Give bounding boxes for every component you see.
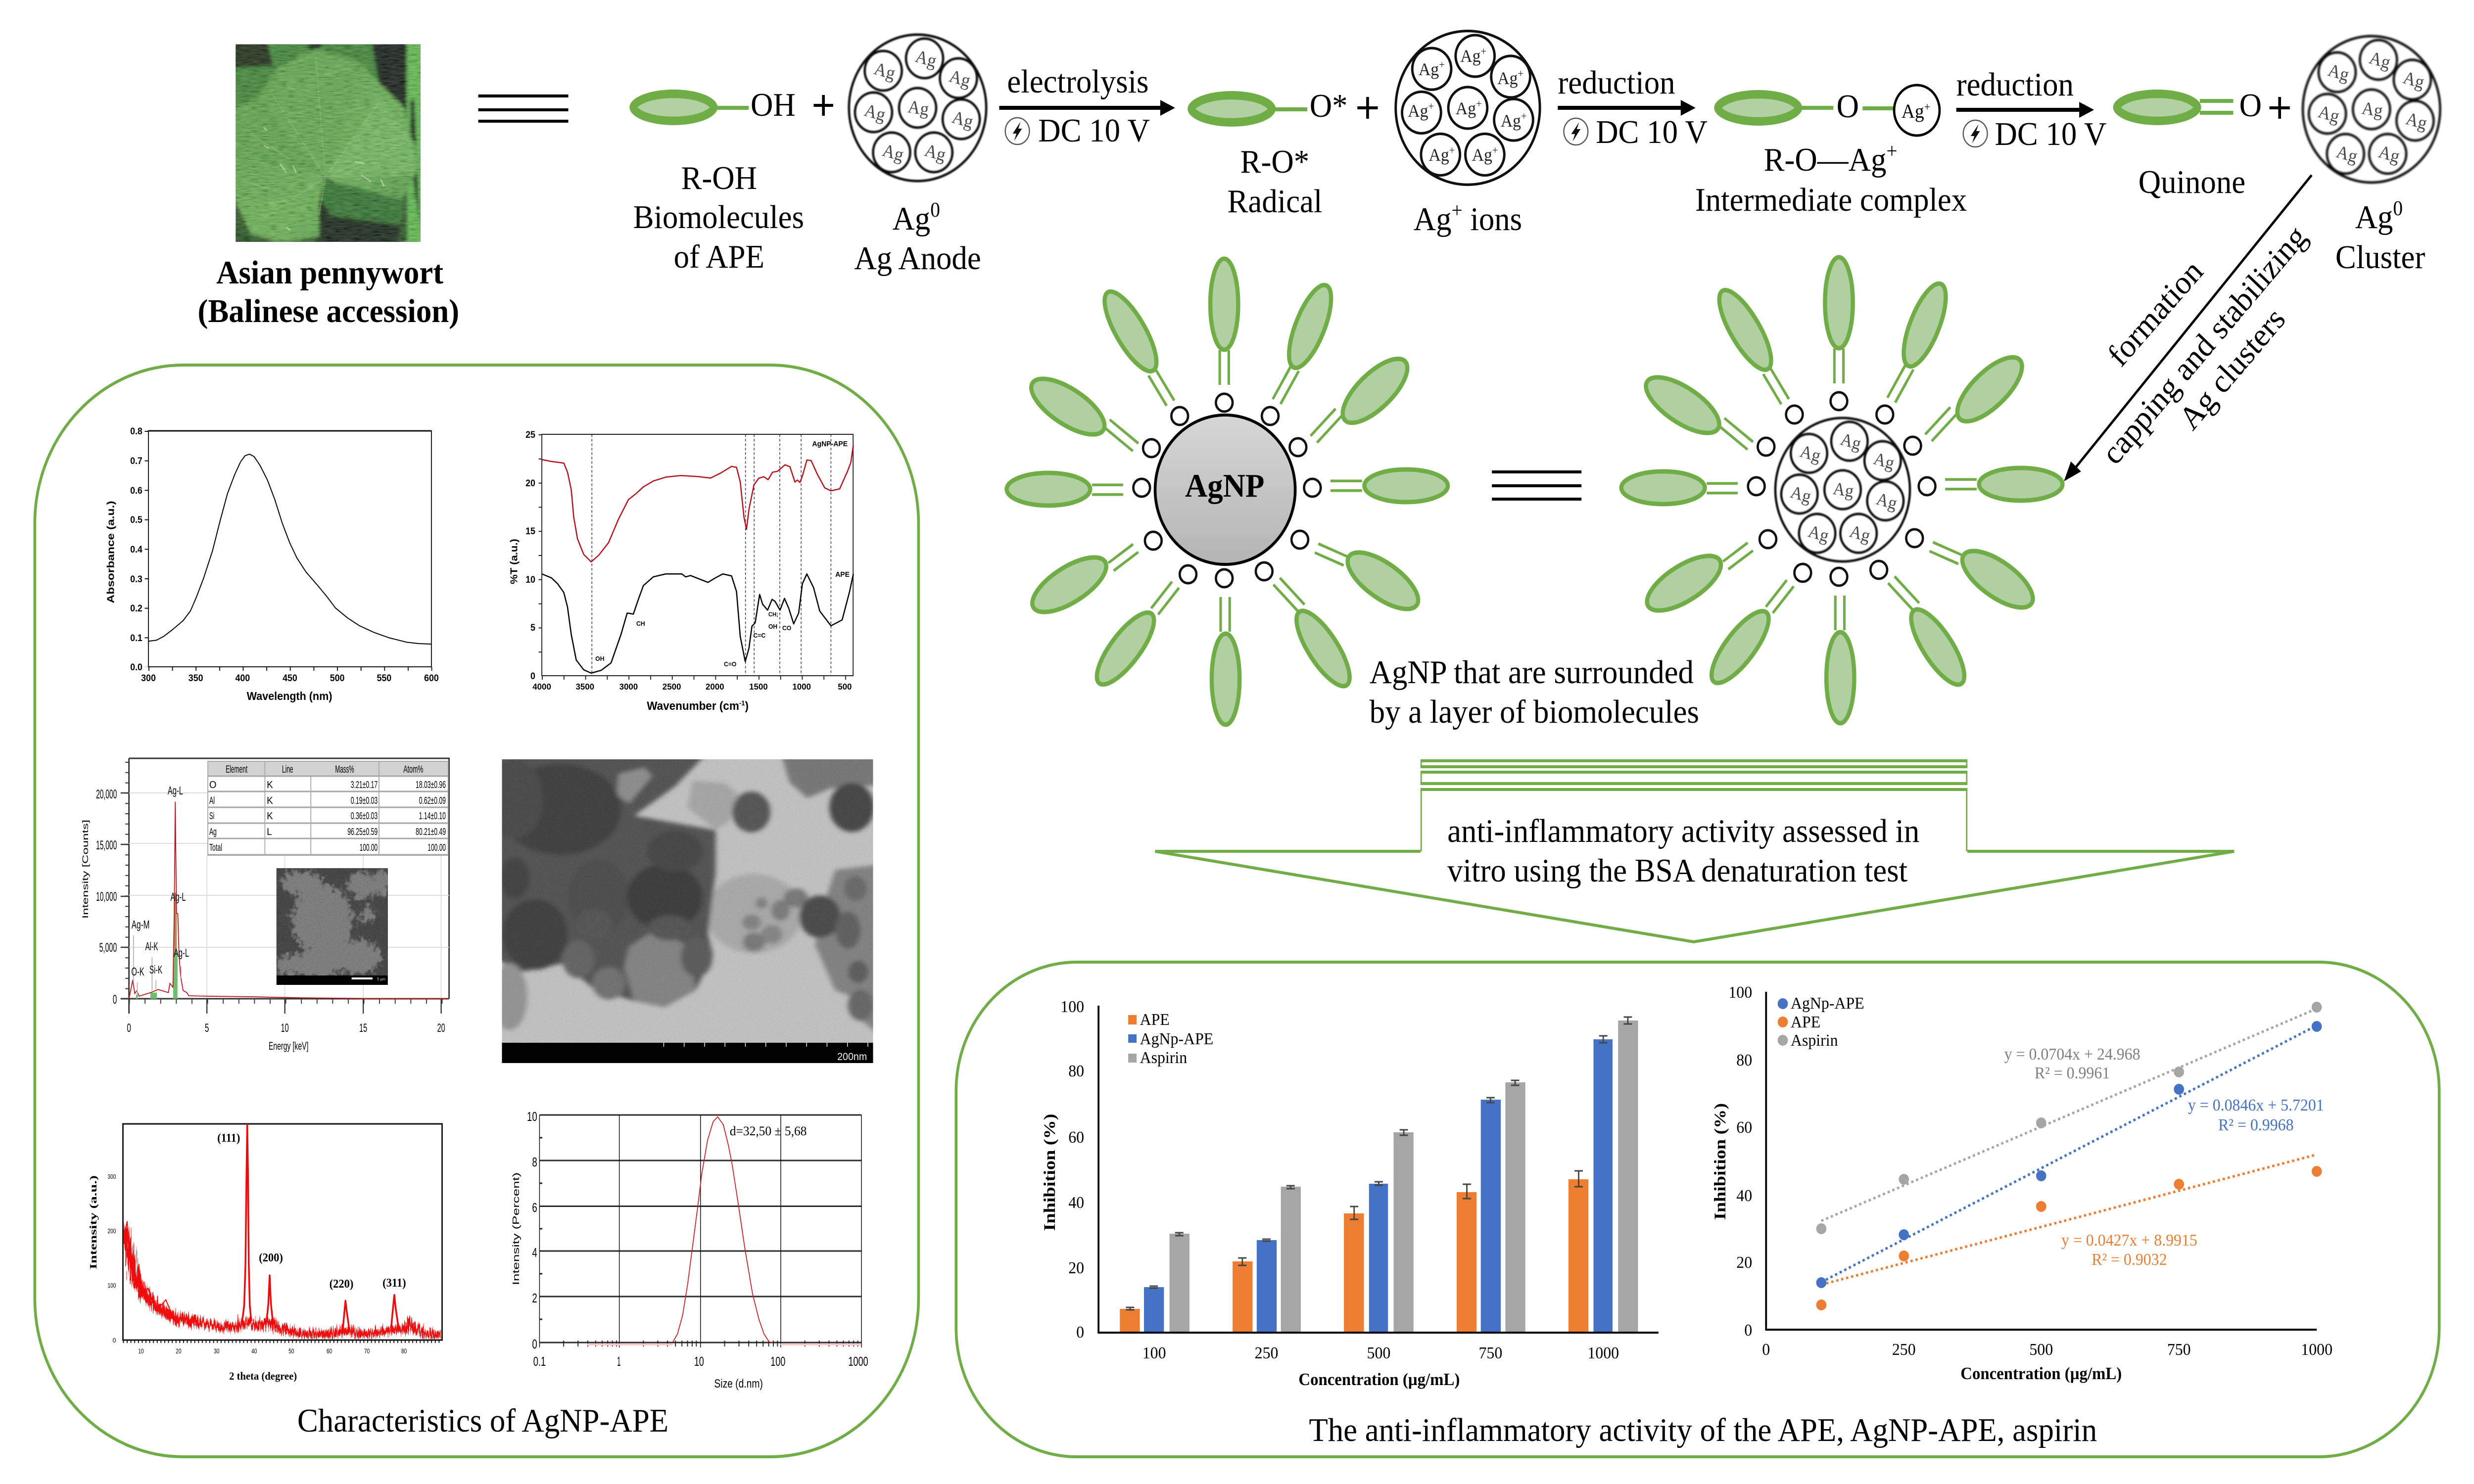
chart: FTIR spectra of AgNP-APE and APE: 3500 [575,681,594,692]
chart: UV-Vis absorbance spectrum: 0.0 [130,661,143,672]
label: AgNP surrounded by biomolecules [1370,654,1699,730]
cluster: Ag0 cluster: Ag [2361,97,2384,121]
cluster: Ag0 cluster [2303,36,2440,183]
diagram: Ag cluster surrounded by biomolecules: Ag [1874,489,1899,513]
chart: XRD pattern: (311) [382,1276,406,1290]
cluster: Ag anode: Ag [948,65,973,91]
image: SEM micrograph inset [276,868,390,985]
regression label: aspirin [2004,1045,2141,1082]
label: Ag+ ions: ions [1463,201,1522,237]
plus sign [2270,97,2290,119]
chart: XRD pattern: 80 [401,1347,407,1355]
chart: EDS spectrum with element table and SEM inset: Total [209,842,222,853]
diagram: AgNP surrounded by biomolecules: AgNP [1185,467,1264,504]
chart: DLS size distribution: Size (d.nm) [714,1377,763,1390]
diagram: Ag cluster surrounded by biomolecules: Ag [1872,448,1897,473]
chart: EDS spectrum with element table and SEM inset: 15,000 [96,838,117,852]
chart: FTIR spectra of AgNP-APE and APE: 2500 [663,681,681,692]
chart: UV-Vis absorbance spectrum: 0.2 [130,603,143,613]
scatter chart: inhibition linear regression: 40 [1736,1187,1752,1205]
scatter chart: inhibition linear regression: 0 [1744,1321,1752,1340]
legend: bar chart: AgNp-APE [1140,1030,1213,1048]
cluster: Ag+ ions: + [1449,144,1455,156]
diagram: Ag cluster surrounded by biomolecules: Ag [1839,429,1863,454]
legend: bar chart: APE [1140,1011,1170,1029]
scatter chart: inhibition linear regression: 750 [2167,1341,2191,1359]
legend: scatter chart [1778,994,1864,1050]
chart: EDS spectrum with element table and SEM inset: Al [209,795,215,806]
caption: anti-inflammatory activity comparison: The anti-inflammatory activity of the APE, AgNP-APE, aspirin [1309,1412,2097,1448]
chart: FTIR spectra of AgNP-APE and APE: CH [636,620,645,627]
chart: EDS spectrum with element table and SEM inset: Ag-L [168,784,183,797]
chart: EDS spectrum with element table and SEM inset: 0.19±0.03 [351,795,378,806]
cluster: Ag+ ions: Ag [1428,145,1449,165]
molecule: R-OH biomolecule: OH [751,87,796,123]
label: R-O-Ag+ intermediate complex [1695,139,1967,218]
cluster: Ag+ ions: + [1521,110,1527,122]
label: R-O* radical: R-O* [1240,143,1309,180]
chart: FTIR spectra of AgNP-APE and APE: C=C [753,632,765,639]
chart: FTIR spectra of AgNP-APE and APE: 1000 [792,681,811,692]
bar chart: inhibition by concentration: 100 [1060,998,1084,1016]
chart: FTIR spectra of AgNP-APE and APE: AgNP-APE [812,440,848,448]
chart: EDS spectrum with element table and SEM inset: Al-K [145,940,158,953]
chart: EDS spectrum with element table and SEM inset: 10 [281,1021,289,1034]
bar chart: inhibition by concentration: 0 [1076,1323,1084,1342]
scatter chart: inhibition linear regression [1712,983,2332,1383]
regression label: AgNp-APE [2188,1096,2324,1134]
chart: EDS spectrum with element table and SEM inset: Energy [keV] [269,1040,308,1052]
arrow: second reduction step: reduction [1956,66,2074,103]
cluster: Ag0 cluster: Ag [2316,101,2341,127]
chart: FTIR spectra of AgNP-APE and APE: 500 [838,681,852,692]
label: Ag0 Ag anode [854,198,981,277]
bar chart: inhibition by concentration: 40 [1068,1194,1084,1212]
chart: FTIR spectra of AgNP-APE and APE: CO [782,625,791,632]
molecule: quinone [2113,87,2262,125]
chart: XRD pattern [89,1124,442,1382]
chart: FTIR spectra of AgNP-APE and APE: ) [745,699,749,712]
bar chart: inhibition by concentration: 500 [1367,1344,1390,1362]
chart: UV-Vis absorbance spectrum: 0.4 [130,544,143,555]
molecule: R-O* radical [1188,88,1348,127]
diagram: Ag cluster surrounded by biomolecules [1621,257,2062,723]
molecule: R-O-Ag+ intermediate complex: + [1924,100,1930,114]
chart: EDS spectrum with element table and SEM inset: 15 [359,1021,367,1034]
striped down arrow: anti-inflammatory activity: vitro using the BSA denaturation test [1447,852,1907,889]
heading: Asian pennywort label: (Balinese accession) [197,293,459,329]
label: Ag+ ions: + [1452,199,1463,222]
molecule: quinone: O [2239,87,2262,124]
bar chart: inhibition by concentration: 100 [1142,1344,1166,1362]
chart: XRD pattern: (111) [217,1131,240,1145]
chart: XRD pattern: 200 [108,1228,116,1235]
image: TEM micrograph: 200nm [837,1051,867,1063]
diagram: AgNP surrounded by biomolecules [1007,259,1448,725]
plus sign [1357,97,1378,119]
chart: XRD pattern: 60 [327,1347,332,1355]
chart: UV-Vis absorbance spectrum: 0.3 [130,573,143,584]
regression label: APE: y = 0.0427x + 8.9915 [2061,1231,2197,1250]
cluster: Ag+ ions: + [1480,45,1486,57]
cluster: Ag+ ions: Ag [1408,101,1428,121]
chart: UV-Vis absorbance spectrum: 500 [330,672,344,683]
arrow: second reduction step [1956,66,2106,152]
chart: XRD pattern: 300 [108,1173,116,1180]
regression label: aspirin: R² = 0.9961 [2035,1064,2110,1082]
scatter chart: inhibition linear regression: 500 [2029,1341,2053,1359]
chart: FTIR spectra of AgNP-APE and APE: 25 [525,429,535,440]
chart: XRD pattern: 40 [251,1347,257,1355]
chart: FTIR spectra of AgNP-APE and APE: %T (a.u.) [508,539,520,584]
arrow: electrolysis step: DC 10 V [1038,112,1150,149]
scatter chart: inhibition linear regression: 1000 [2301,1341,2332,1359]
chart: EDS spectrum with element table and SEM inset: Ag [209,826,217,837]
chart: DLS size distribution: d=32,50 ± 5,68 [730,1124,807,1138]
chart: DLS size distribution: 0 [532,1337,537,1351]
label: R-O-Ag+ intermediate complex: Intermediate complex [1695,182,1967,218]
cluster: Ag anode: Ag [872,58,898,84]
chart: DLS size distribution: 4 [532,1246,537,1260]
chart: XRD pattern: (200) [259,1251,283,1264]
chart: UV-Vis absorbance spectrum: 400 [235,672,250,683]
chart: EDS spectrum with element table and SEM inset: 20 [437,1021,445,1034]
chart: FTIR spectra of AgNP-APE and APE: 0 [530,670,535,681]
arrow: first reduction step [1558,64,1708,150]
molecule: R-O-Ag+ intermediate complex: O [1837,88,1859,125]
chart: EDS spectrum with element table and SEM inset: 10,000 [96,890,117,904]
chart: XRD pattern: (220) [330,1277,353,1291]
panel: anti-inflammatory activity [956,962,2439,1457]
chart: UV-Vis absorbance spectrum: 0.8 [130,425,143,436]
chart: UV-Vis absorbance spectrum: 0.1 [130,632,143,643]
chart: DLS size distribution: 10 [527,1110,537,1124]
label: Ag0 Ag anode: 0 [930,198,940,221]
chart: DLS size distribution: 1000 [848,1354,868,1369]
molecule: R-O-Ag+ intermediate complex: Ag [1902,100,1924,122]
chart: EDS spectrum with element table and SEM inset: 0.62±0.09 [419,795,446,806]
chart: EDS spectrum with element table and SEM inset: 5 [205,1021,209,1034]
molecule: R-OH biomolecule [629,87,796,125]
chart: UV-Vis absorbance spectrum: Wavelength (nm) [247,690,332,702]
chart: EDS spectrum with element table and SEM inset: L [267,826,272,837]
legend: bar chart [1128,1011,1213,1067]
cluster: Ag+ ions: Ag [1456,98,1476,118]
chart: EDS spectrum with element table and SEM inset: Mass% [335,764,354,775]
label: R-O-Ag+ intermediate complex: + [1886,139,1898,162]
chart: XRD pattern: 30 [214,1347,219,1355]
regression label: AgNp-APE: R² = 0.9968 [2218,1116,2294,1134]
cluster: Ag0 cluster: Ag [2404,108,2429,134]
striped down arrow: anti-inflammatory activity: anti-inflammatory activity assessed in [1447,813,1919,849]
chart: UV-Vis absorbance spectrum: 0.7 [130,455,143,466]
scatter chart: inhibition linear regression: 250 [1892,1341,1916,1359]
chart: DLS size distribution: 100 [770,1354,785,1369]
chart: EDS spectrum with element table and SEM inset: Atom% [403,764,424,775]
cluster: Ag anode: Ag [862,99,888,125]
chart: EDS spectrum with element table and SEM inset: Ag-L [174,946,189,959]
chart: EDS spectrum with element table and SEM inset: O [209,779,216,790]
label: AgNP surrounded by biomolecules: by a layer of biomolecules [1370,694,1699,730]
scatter chart: inhibition linear regression: 100 [1728,983,1752,1002]
scatter chart: inhibition linear regression: Concentration (µg/mL) [1960,1364,2122,1383]
cluster: Ag+ ions: + [1518,67,1523,80]
bar chart: inhibition by concentration: 80 [1068,1062,1084,1080]
chart: FTIR spectra of AgNP-APE and APE: 3000 [619,681,638,692]
legend: scatter chart: AgNp-APE [1791,994,1864,1013]
chart: FTIR spectra of AgNP-APE and APE: CH; [768,611,778,618]
chart: UV-Vis absorbance spectrum: 600 [424,672,439,683]
cluster: Ag0 cluster: Ag [2377,141,2402,167]
label: Ag0 cluster: Cluster [2335,239,2426,276]
chart: EDS spectrum with element table and SEM inset: K [267,779,273,790]
label: R-O-Ag+ intermediate complex: R-O—Ag [1764,141,1886,178]
image: TEM micrograph [487,747,889,1063]
legend: bar chart: Aspirin [1140,1049,1187,1067]
label: AgNP surrounded by biomolecules: AgNP that are surrounded [1370,654,1694,691]
chart: UV-Vis absorbance spectrum: 550 [377,672,391,683]
chart: EDS spectrum with element table and SEM inset: O-K [131,965,144,978]
label: R-OH biomolecules of APE: R-OH [681,160,757,196]
chart: EDS spectrum with element table and SEM inset: 20,000 [96,788,117,801]
chart: EDS spectrum with element table and SEM inset: 0 [127,1021,131,1034]
chart: EDS spectrum with element table and SEM inset: 1.14±0.10 [419,810,446,822]
cluster: Ag anode: Ag [881,139,906,165]
diagram: Ag cluster surrounded by biomolecules: Ag [1832,478,1855,501]
rotated label: formation, capping and stabilizing Ag clusters: formation [2101,253,2210,373]
bar chart: inhibition by concentration [1041,998,1659,1389]
chart: FTIR spectra of AgNP-APE and APE: 4000 [532,681,551,692]
chart: FTIR spectra of AgNP-APE and APE: C=O [724,661,737,668]
equivalence sign: AgNP to Ag cluster core [1492,472,1581,499]
label: Ag+ ions: Ag [1414,201,1452,237]
diagram: Ag cluster surrounded by biomolecules: Ag [1798,441,1823,466]
plus sign [813,95,833,116]
scatter chart: inhibition linear regression: 0 [1762,1341,1770,1359]
arrow: electrolysis step [999,63,1175,149]
chart: EDS spectrum with element table and SEM inset: 18.03±0.96 [416,779,446,790]
chart: EDS spectrum with element table and SEM inset: 0.36±0.03 [351,810,378,822]
chart: FTIR spectra of AgNP-APE and APE: APE [835,571,850,579]
chart: FTIR spectra of AgNP-APE and APE: 2000 [706,681,724,692]
chart: XRD pattern: 10 [138,1347,144,1355]
label: R-OH biomolecules of APE: of APE [674,238,764,275]
chart: EDS spectrum with element table and SEM inset: Si-K [149,963,162,976]
chart: UV-Vis absorbance spectrum: 0.5 [130,514,143,525]
chart: UV-Vis absorbance spectrum: 350 [189,672,203,683]
label: Ag0 Ag anode: Ag Anode [854,240,981,277]
chart: DLS size distribution: 1 [617,1354,620,1369]
chart: UV-Vis absorbance spectrum: 0.6 [130,485,143,496]
regression label: AgNp-APE: y = 0.0846x + 5.7201 [2188,1096,2324,1114]
chart: XRD pattern: Intensity (a.u.) [89,1175,99,1269]
label: R-OH biomolecules of APE [633,160,804,275]
chart: FTIR spectra of AgNP-APE and APE: 5 [530,622,535,633]
chart: DLS size distribution: Intensity (Percent) [511,1172,522,1285]
chart: UV-Vis absorbance spectrum: 450 [283,672,297,683]
chart: EDS spectrum with element table and SEM inset: 0 [113,993,117,1007]
chart: DLS size distribution: 6 [532,1201,537,1215]
molecule: R-O-Ag+ intermediate complex [1714,85,1940,136]
label: Ag0 cluster: Ag [2355,199,2393,235]
chart: XRD pattern: 0 [113,1337,116,1344]
cluster: Ag+ ions: + [1428,100,1434,112]
chart: EDS spectrum with element table and SEM inset: Element [226,764,247,775]
label: Ag0 Ag anode: Ag [892,200,930,237]
chart: FTIR spectra of AgNP-APE and APE: 20 [525,477,535,488]
molecule: R-O* radical: O* [1310,88,1348,124]
bar chart: inhibition by concentration: Inhibition (%) [1041,1114,1059,1231]
chart: EDS spectrum with element table and SEM inset: Si [209,810,214,822]
chart: UV-Vis absorbance spectrum: 300 [141,672,156,683]
regression label: aspirin: y = 0.0704x + 24.968 [2004,1045,2141,1064]
arrow: first reduction step: reduction [1558,64,1675,101]
chart: UV-Vis absorbance spectrum [105,425,439,702]
chart: EDS spectrum with element table and SEM inset: K [267,810,273,822]
chart: FTIR spectra of AgNP-APE and APE: 15 [525,525,535,536]
cluster: Ag+ ions: + [1476,97,1482,110]
chart: EDS spectrum with element table and SEM inset: 80.21±0.49 [416,826,446,837]
label: R-O* radical [1227,143,1322,220]
cluster: Ag+ ions: + [1439,58,1445,71]
diagram: Ag cluster surrounded by biomolecules: Ag [1848,521,1872,546]
bar chart: inhibition by concentration: 750 [1478,1344,1502,1362]
label: quinone: Quinone [2139,164,2245,200]
cluster: Ag anode: Ag [950,106,975,132]
label: Ag0 cluster: 0 [2393,197,2403,220]
scatter chart: inhibition linear regression: 60 [1736,1118,1752,1137]
cluster: Ag anode: Ag [923,139,948,165]
striped down arrow: anti-inflammatory activity [1155,759,2234,942]
arrow: first reduction step: DC 10 V [1596,114,1708,150]
chart: XRD pattern: 50 [288,1347,294,1355]
label: Ag0 cluster [2335,197,2426,276]
label: R-OH biomolecules of APE: Biomolecules [633,199,804,235]
label: R-O* radical: Radical [1227,183,1322,220]
cluster: Ag+ ions: Ag [1501,111,1521,131]
bar chart: inhibition by concentration: 60 [1068,1128,1084,1147]
rotated label: formation, capping and stabilizing Ag clusters: capping and stabilizing [2095,219,2314,471]
chart: EDS spectrum with element table and SEM inset: 96.25±0.59 [347,826,378,837]
image: SEM micrograph inset: 5 µm [377,977,385,981]
legend: scatter chart: Aspirin [1791,1031,1838,1050]
caption: characteristics of AgNP-APE: Characteristics of AgNP-APE [297,1402,668,1439]
scatter chart: inhibition linear regression: Inhibition (%) [1712,1103,1729,1220]
chart: EDS spectrum with element table and SEM inset: Ag-M [132,918,149,931]
cluster: Ag+ ions: Ag [1497,68,1518,88]
arrow: formation, capping and stabilizing [2064,175,2312,481]
scatter chart: inhibition linear regression: 20 [1736,1253,1752,1272]
chart: FTIR spectra of AgNP-APE and APE: Wavenumber (cm [647,699,739,712]
chart: EDS spectrum with element table and SEM inset: Ag-L [171,890,186,903]
chart: UV-Vis absorbance spectrum: Absorbance (a.u.) [105,501,116,603]
bar chart: inhibition by concentration: 250 [1255,1344,1278,1362]
chart: EDS spectrum with element table and SEM inset: 100.00 [360,842,378,853]
cluster: Ag+ ions: + [1492,144,1498,156]
cluster: Ag0 cluster: Ag [2326,59,2351,85]
chart: DLS size distribution: 8 [532,1155,537,1169]
cluster: Ag0 cluster: Ag [2401,67,2426,93]
chart: XRD pattern: 2 theta (degree) [229,1370,297,1382]
cluster: Ag0 cluster: Ag [2367,47,2392,73]
panel: characteristics of AgNP-APE [35,365,918,1457]
equivalence sign: leaf to biomolecule [478,96,569,121]
arrow: electrolysis step: electrolysis [1007,63,1149,100]
legend: scatter chart: APE [1791,1013,1820,1031]
bar chart: inhibition by concentration: 20 [1068,1259,1084,1277]
chart: EDS spectrum with element table and SEM inset: K [267,795,273,806]
chart: EDS spectrum with element table and SEM inset [81,758,449,1052]
chart: FTIR spectra of AgNP-APE and APE [508,429,854,712]
cluster: Ag+ ions: Ag [1472,145,1492,165]
chart: DLS size distribution [511,1110,868,1390]
cluster: Ag anode: Ag [906,96,930,119]
chart: FTIR spectra of AgNP-APE and APE: OH [768,623,777,630]
chart: EDS spectrum with element table and SEM inset: 5,000 [99,941,117,955]
chart: XRD pattern: 20 [176,1347,182,1355]
chart: XRD pattern: 100 [108,1282,116,1289]
regression label: APE: R² = 0.9032 [2092,1251,2167,1269]
chart: DLS size distribution: 2 [532,1291,537,1305]
photo: Asian pennywort leaf [236,45,421,242]
cluster: Ag0 cluster: Ag [2334,141,2360,167]
heading: Asian pennywort label: Asian pennywort [216,254,443,291]
chart: EDS spectrum with element table and SEM inset: 3.21±0.17 [351,779,378,790]
scatter chart: inhibition linear regression: 80 [1736,1051,1752,1069]
cluster: Ag anode: Ag [913,46,939,71]
heading: Asian pennywort label [197,254,459,329]
cluster: Ag anode [849,35,986,181]
rotated label: formation, capping and stabilizing Ag clusters: Ag clusters [2172,301,2292,437]
cluster: Ag+ ions: Ag [1460,46,1480,66]
chart: FTIR spectra of AgNP-APE and APE: OH [595,655,604,662]
chart: XRD pattern: 70 [364,1347,370,1355]
chart: EDS spectrum with element table and SEM inset: Line [282,764,293,775]
cluster: Ag+ ions: Ag [1419,59,1439,79]
chart: DLS size distribution: 10 [694,1354,704,1369]
bar chart: inhibition by concentration: 1000 [1587,1344,1619,1362]
chart: FTIR spectra of AgNP-APE and APE: 1500 [749,681,768,692]
chart: FTIR spectra of AgNP-APE and APE: 10 [525,574,535,585]
diagram: Ag cluster surrounded by biomolecules: Ag [1789,482,1813,507]
arrow: second reduction step: DC 10 V [1995,116,2106,152]
chart: DLS size distribution: 0.1 [533,1354,546,1369]
chart: EDS spectrum with element table and SEM inset: 100.00 [428,842,446,853]
bar chart: inhibition by concentration: Concentration (µg/mL) [1298,1370,1460,1389]
cluster: Ag+ ions [1396,31,1540,185]
chart: EDS spectrum with element table and SEM inset: Intensity [Counts] [81,820,90,919]
diagram: Ag cluster surrounded by biomolecules: Ag [1806,521,1831,546]
chart: FTIR spectra of AgNP-APE and APE: -1 [739,699,745,707]
regression label: APE [2061,1231,2197,1269]
